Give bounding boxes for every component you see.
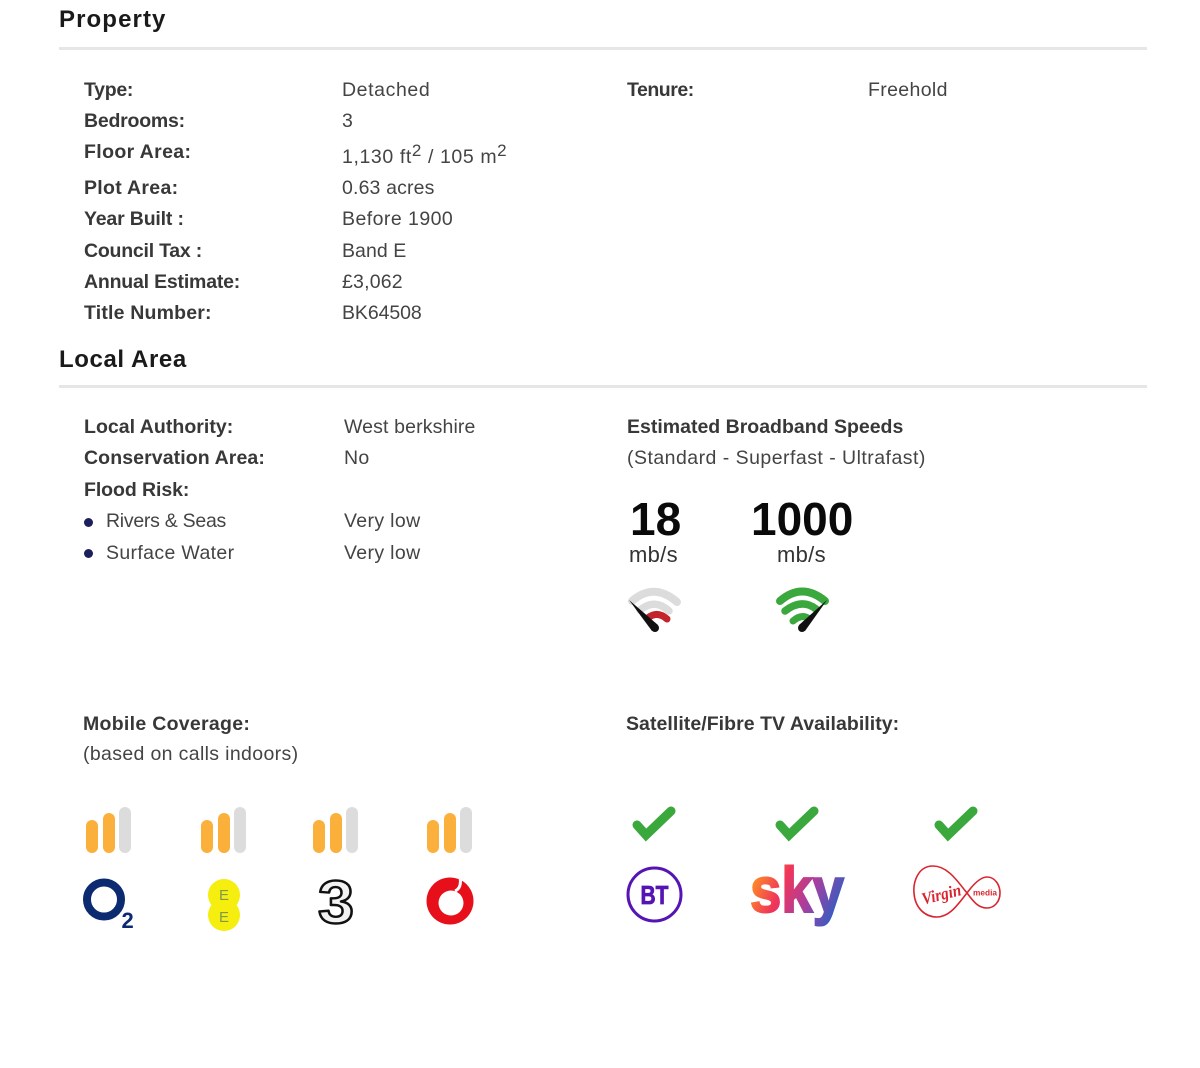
conservation area label: Conservation Area: xyxy=(84,447,265,469)
icon: Virgin Media check xyxy=(934,806,978,842)
logo: Vodafone xyxy=(426,878,474,924)
flood risk label: Flood Risk: xyxy=(84,479,189,501)
ultrafast speed value: 1000 xyxy=(751,493,853,545)
rivers and seas label: Rivers & Seas xyxy=(106,510,226,532)
heading: Property: Property xyxy=(59,6,166,33)
panel: broadband speeds xyxy=(627,416,926,632)
icon: standard speed gauge xyxy=(628,588,681,632)
icon: O2 signal bars xyxy=(86,807,131,853)
panel: local area details xyxy=(84,416,476,564)
conservation area value: No xyxy=(344,447,370,469)
surface water value: Very low xyxy=(344,542,420,564)
icon: Sky check xyxy=(776,806,818,842)
heading: Local Area: Local Area xyxy=(59,346,187,373)
icon: ultrafast speed gauge xyxy=(776,588,829,632)
logo: EE xyxy=(208,879,240,931)
broadband heading: Estimated Broadband Speeds xyxy=(627,416,903,438)
annual estimate value: £3,062 xyxy=(342,271,403,293)
title number label: Title Number: xyxy=(84,302,212,324)
standard speed unit: mb/s xyxy=(629,542,678,567)
floor area label: Floor Area: xyxy=(84,141,191,163)
rivers and seas value: Very low xyxy=(344,510,420,532)
logo: EE: E xyxy=(219,909,229,926)
mobile coverage note: (based on calls indoors) xyxy=(83,743,298,765)
bullet: rivers and seas xyxy=(84,518,93,527)
floor area value: 1,130 ft2 / 105 m2 xyxy=(342,141,507,168)
panel: mobile coverage xyxy=(83,713,474,936)
broadband subheading: (Standard - Superfast - Ultrafast) xyxy=(627,447,926,469)
mobile coverage heading: Mobile Coverage: xyxy=(83,713,250,735)
panel: satellite and fibre TV availability xyxy=(626,713,1001,926)
type value: Detached xyxy=(342,79,430,101)
ultrafast speed unit: mb/s xyxy=(777,542,826,567)
plot area label: Plot Area: xyxy=(84,177,178,199)
title number value: BK64508 xyxy=(342,302,422,324)
type label: Type: xyxy=(84,79,133,101)
local authority label: Local Authority: xyxy=(84,416,233,438)
year built label: Year Built : xyxy=(84,208,184,230)
TV availability heading: Satellite/Fibre TV Availability: xyxy=(626,713,899,735)
year built value: Before 1900 xyxy=(342,208,453,230)
local authority value: West berkshire xyxy=(344,416,476,438)
logo: O2 xyxy=(83,878,134,933)
council tax label: Council Tax : xyxy=(84,240,202,262)
logo: Virgin Media xyxy=(913,865,1001,918)
icon: BT check xyxy=(632,806,676,842)
bedrooms label: Bedrooms: xyxy=(84,110,185,132)
tenure value: Freehold xyxy=(868,79,948,101)
logo: BT: BT xyxy=(640,880,669,910)
logo: Sky: sky xyxy=(750,854,844,926)
bedrooms value: 3 xyxy=(342,110,353,132)
council tax value: Band E xyxy=(342,240,406,262)
icon: Three signal bars xyxy=(313,807,358,853)
logo: O2: 2 xyxy=(122,908,134,933)
icon: Vodafone signal bars xyxy=(427,807,472,853)
annual estimate label: Annual Estimate: xyxy=(84,271,240,293)
plot area value: 0.63 acres xyxy=(342,177,435,199)
logo: Virgin Media: media xyxy=(973,888,997,898)
icon: EE signal bars xyxy=(201,807,246,853)
logo: BT xyxy=(626,866,682,922)
logo: Three: 3 xyxy=(318,869,354,936)
tenure label: Tenure: xyxy=(627,79,694,101)
panel: property details xyxy=(84,79,948,324)
bullet: surface water xyxy=(84,549,93,558)
logo: EE: E xyxy=(219,887,229,904)
surface water label: Surface Water xyxy=(106,542,234,564)
standard speed value: 18 xyxy=(630,493,681,545)
logo: Virgin Media: Virgin xyxy=(920,880,963,909)
